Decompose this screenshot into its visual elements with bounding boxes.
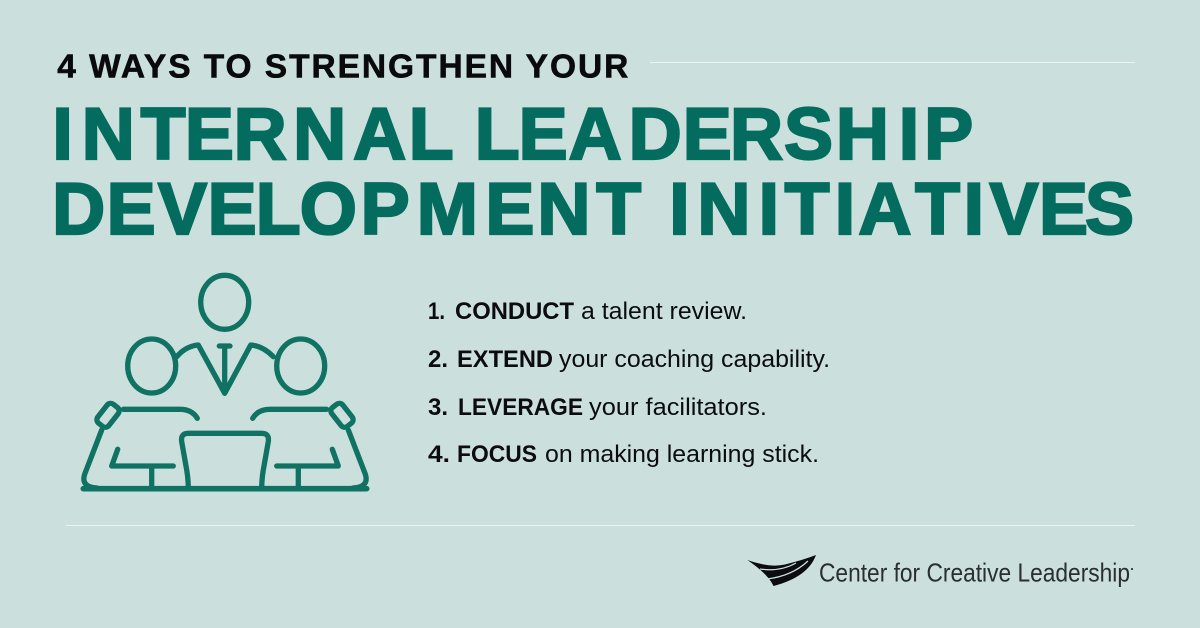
item 2: 2. bbox=[428, 346, 448, 373]
item 3: 3. bbox=[428, 394, 448, 421]
subtitle heading: 4 WAYS TO STRENGTHEN YOUR bbox=[57, 49, 628, 86]
main title: DEVELOPMENT INITIATIVES bbox=[52, 167, 1134, 250]
item 3: your facilitators. bbox=[589, 394, 767, 421]
item 1: CONDUCT bbox=[455, 298, 574, 325]
main title: INTERNAL LEADERSHIP bbox=[52, 92, 973, 175]
logo wordmark: Center for Creative Leadership bbox=[819, 558, 1130, 588]
item 1 bbox=[428, 298, 747, 325]
item 2: EXTEND bbox=[457, 346, 553, 373]
item 3: LEVERAGE bbox=[458, 394, 583, 421]
item 2: your coaching capability. bbox=[559, 346, 830, 373]
main title bbox=[52, 92, 1134, 250]
icon: logo wing bbox=[747, 555, 816, 586]
item 4: 4. bbox=[428, 441, 450, 468]
item 2 bbox=[428, 346, 830, 373]
item 4 bbox=[428, 441, 819, 468]
icon: three people meeting around a laptop bbox=[83, 275, 367, 489]
item 4: FOCUS bbox=[457, 441, 537, 468]
item 1: a talent review. bbox=[581, 298, 747, 325]
item 3 bbox=[428, 394, 767, 421]
logo: Center for Creative Leadership bbox=[747, 555, 1133, 588]
item 4: on making learning stick. bbox=[545, 441, 819, 468]
numbered list of four ways bbox=[428, 298, 830, 468]
item 1: 1. bbox=[428, 298, 445, 325]
